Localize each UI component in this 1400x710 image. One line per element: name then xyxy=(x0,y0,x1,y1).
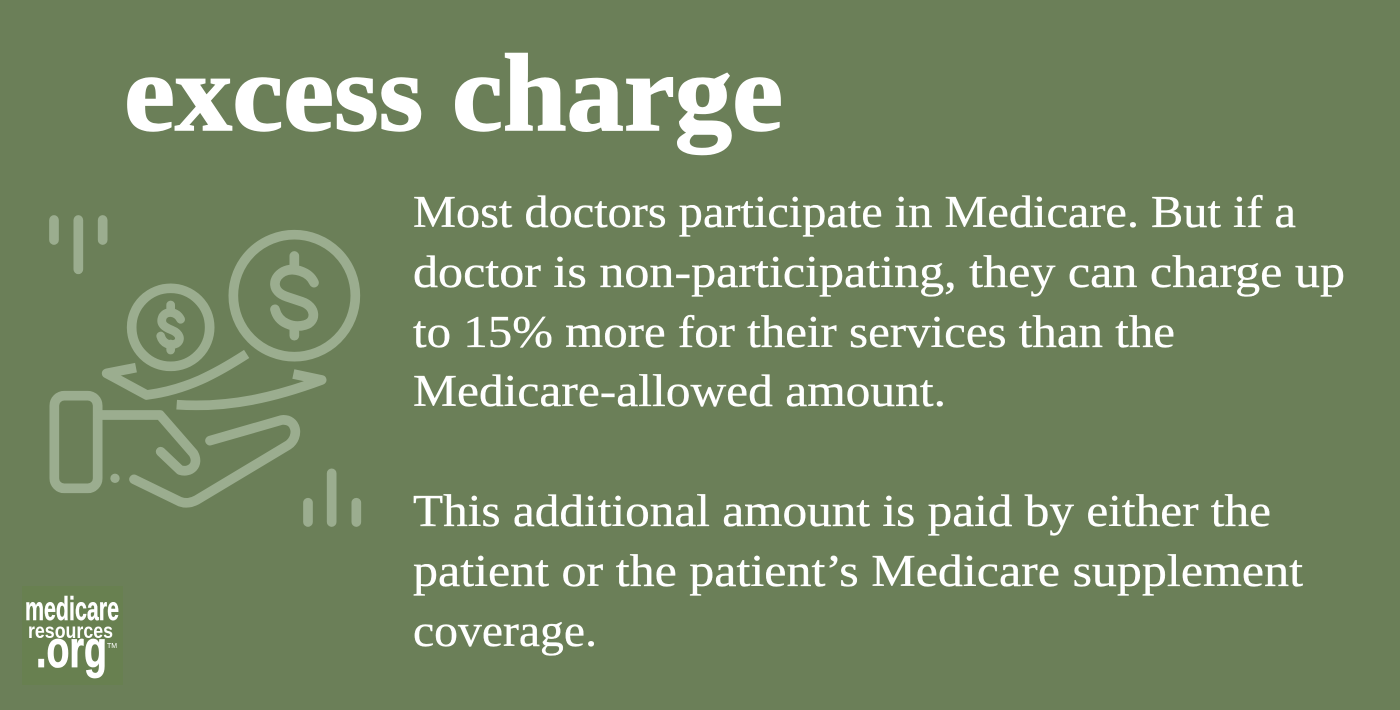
paragraph: participation explanation xyxy=(413,187,1345,416)
logo: medicareresources.org: .org xyxy=(36,621,107,679)
paragraph: who pays xyxy=(413,486,1304,656)
paragraph: participation explanation: Medicare-allowed amount. xyxy=(413,366,946,416)
logo: medicareresources.org: medicare xyxy=(25,590,119,627)
paragraph: who pays: patient or the patient’s Medicare supplement xyxy=(413,546,1304,596)
icon: hand with coins xyxy=(54,220,356,522)
logo: medicareresources.org xyxy=(22,586,123,685)
title: excess charge xyxy=(124,32,783,154)
paragraph: who pays: coverage. xyxy=(413,606,597,656)
logo: medicareresources.org: resources xyxy=(28,620,113,643)
paragraph: participation explanation: to 15% more for their services than the xyxy=(413,307,1175,357)
paragraph: participation explanation: Most doctors participate in Medicare. But if a xyxy=(413,187,1296,237)
paragraph: who pays: This additional amount is paid by either the xyxy=(413,486,1271,536)
paragraph: participation explanation: doctor is non-participating, they can charge up xyxy=(413,247,1345,297)
logo: medicareresources.org: TM xyxy=(107,643,117,650)
